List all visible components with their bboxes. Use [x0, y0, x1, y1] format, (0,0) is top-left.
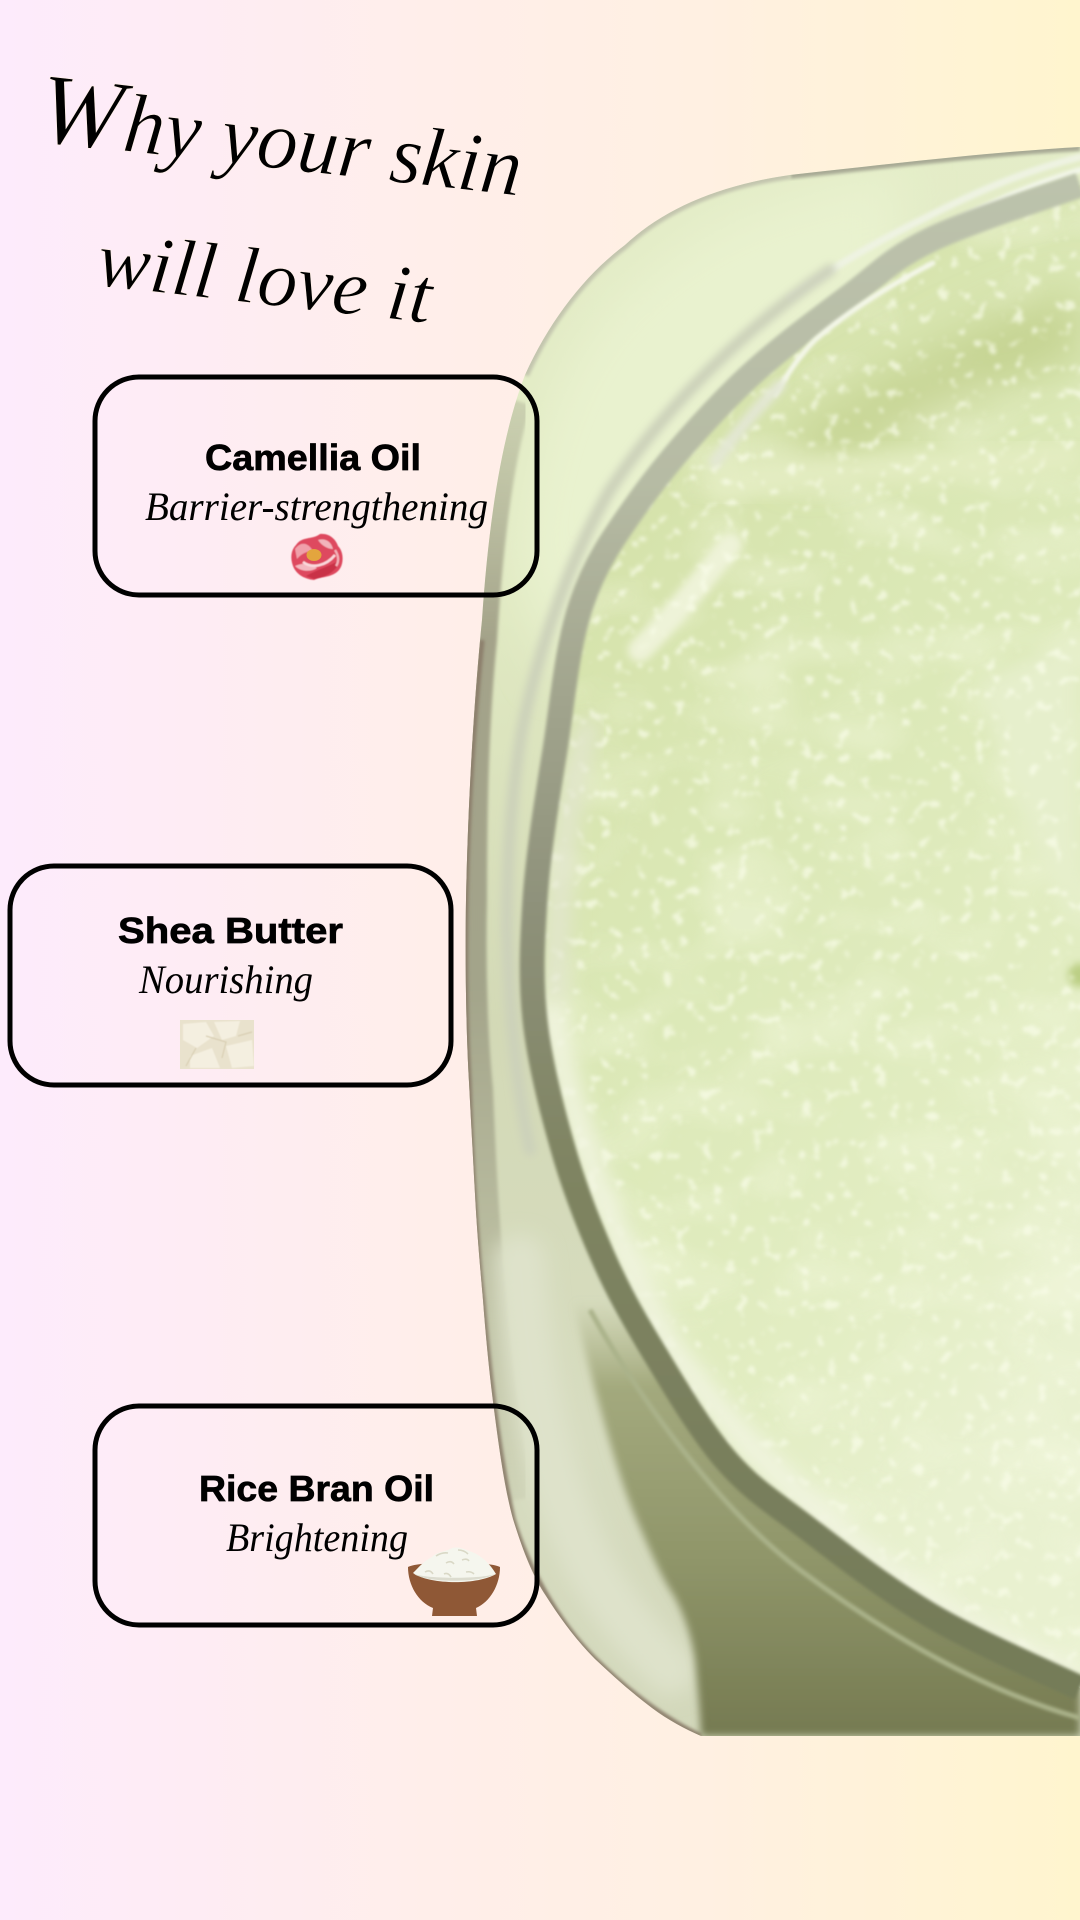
benefit: nourishing: Nourishing [138, 957, 313, 1002]
title line 1: W [34, 52, 137, 173]
benefit: brightening: Brightening [226, 1515, 408, 1560]
benefit: barrier-strengthening: Barrier-strengthening [145, 484, 488, 529]
panel: shea butter [10, 866, 451, 1085]
product photo: jar of green cream [440, 120, 1080, 1760]
heading: rice bran oil: Rice Bran Oil [199, 1468, 434, 1509]
icon: camellia flower [291, 534, 343, 580]
icon: shea butter flakes [180, 1020, 254, 1069]
white rim highlight [775, 263, 933, 395]
thin line in olive glass [590, 1310, 1080, 1718]
left edge grey strip [469, 400, 516, 1500]
cream surface [530, 170, 1080, 1700]
pale sugar band lower left [520, 1260, 670, 1670]
title [34, 52, 529, 341]
top rim glass highlights [833, 153, 1080, 270]
icon: rice bowl [408, 1547, 500, 1616]
glass ring [532, 185, 1080, 1688]
heading: camellia oil: Camellia Oil [205, 437, 421, 478]
pale line beside ring [502, 262, 838, 996]
title line 2: will love it [93, 215, 439, 341]
panel: rice bran oil [95, 1406, 537, 1625]
title line 1: hy your skin [119, 77, 527, 215]
heading: shea butter: Shea Butter [118, 910, 343, 951]
panel: camellia oil [95, 377, 537, 595]
title line 1 [34, 52, 529, 218]
olive lower glass area [578, 1312, 1080, 1736]
